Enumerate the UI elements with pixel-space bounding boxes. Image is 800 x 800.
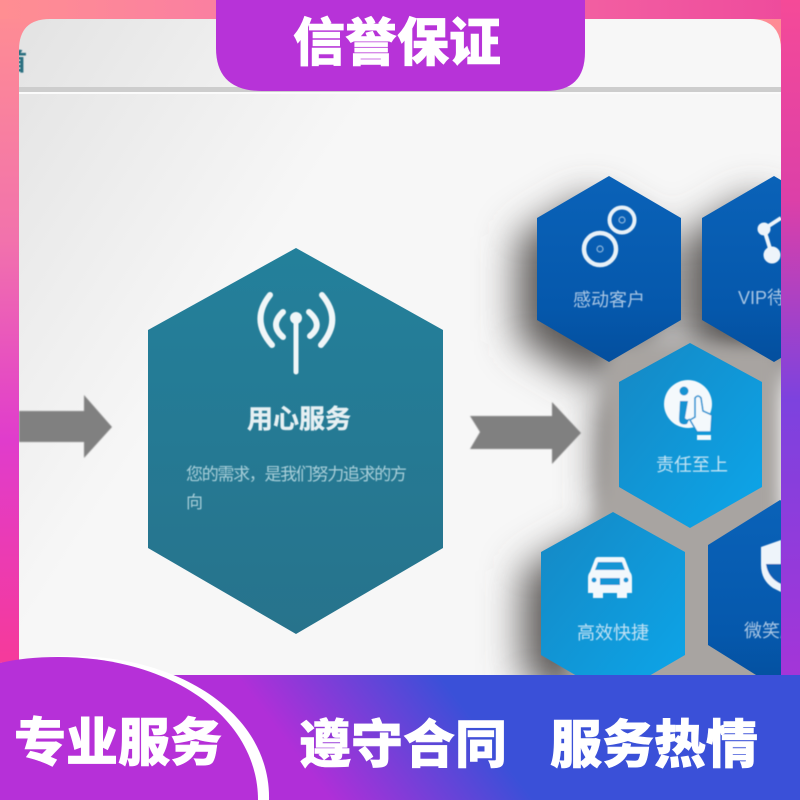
hexagon: 责任至上: [619, 343, 762, 528]
hexagon: 感动客户: 感动客户: [573, 290, 645, 310]
hexagon: 高效快捷: [541, 512, 685, 675]
arrow: left: [19, 395, 112, 458]
icon: antenna signal: [260, 295, 332, 372]
icon: info with hand: [664, 380, 712, 440]
badge: 专业服务: [0, 656, 269, 800]
badge: 专业服务: 专业服务: [14, 715, 222, 773]
hexagon: 微笑服务: [708, 500, 781, 675]
hexagon: 感动客户: [537, 176, 681, 362]
icon: shield: [761, 540, 781, 592]
label: 遵守合同: 遵守合同: [299, 717, 507, 775]
icon: share nodes: [758, 218, 781, 263]
header rule: [19, 87, 781, 94]
title tab: [216, 0, 585, 91]
description: 向: [186, 493, 203, 512]
cropped header glyph: 首: [3, 49, 27, 76]
hexagon: 用心服务: [148, 248, 443, 634]
hexagon: 高效快捷: 高效快捷: [577, 623, 649, 643]
label: 服务热情: 服务热情: [550, 717, 758, 775]
hexagon: VIP待遇: [702, 176, 781, 362]
icon: car: [588, 557, 632, 598]
panel: service image: [19, 19, 781, 675]
hexagon: 责任至上: 责任至上: [656, 455, 728, 475]
heading: 用心服务: [247, 404, 351, 434]
icon: gears: [584, 208, 634, 265]
arrow: middle: [470, 402, 581, 464]
description: [186, 465, 407, 512]
description: 您的需求，是我们努力追求的方: [186, 465, 407, 484]
bottom banner: [0, 656, 800, 800]
hexagon shadows: [518, 196, 800, 717]
title: 信誉保证: [293, 15, 501, 73]
